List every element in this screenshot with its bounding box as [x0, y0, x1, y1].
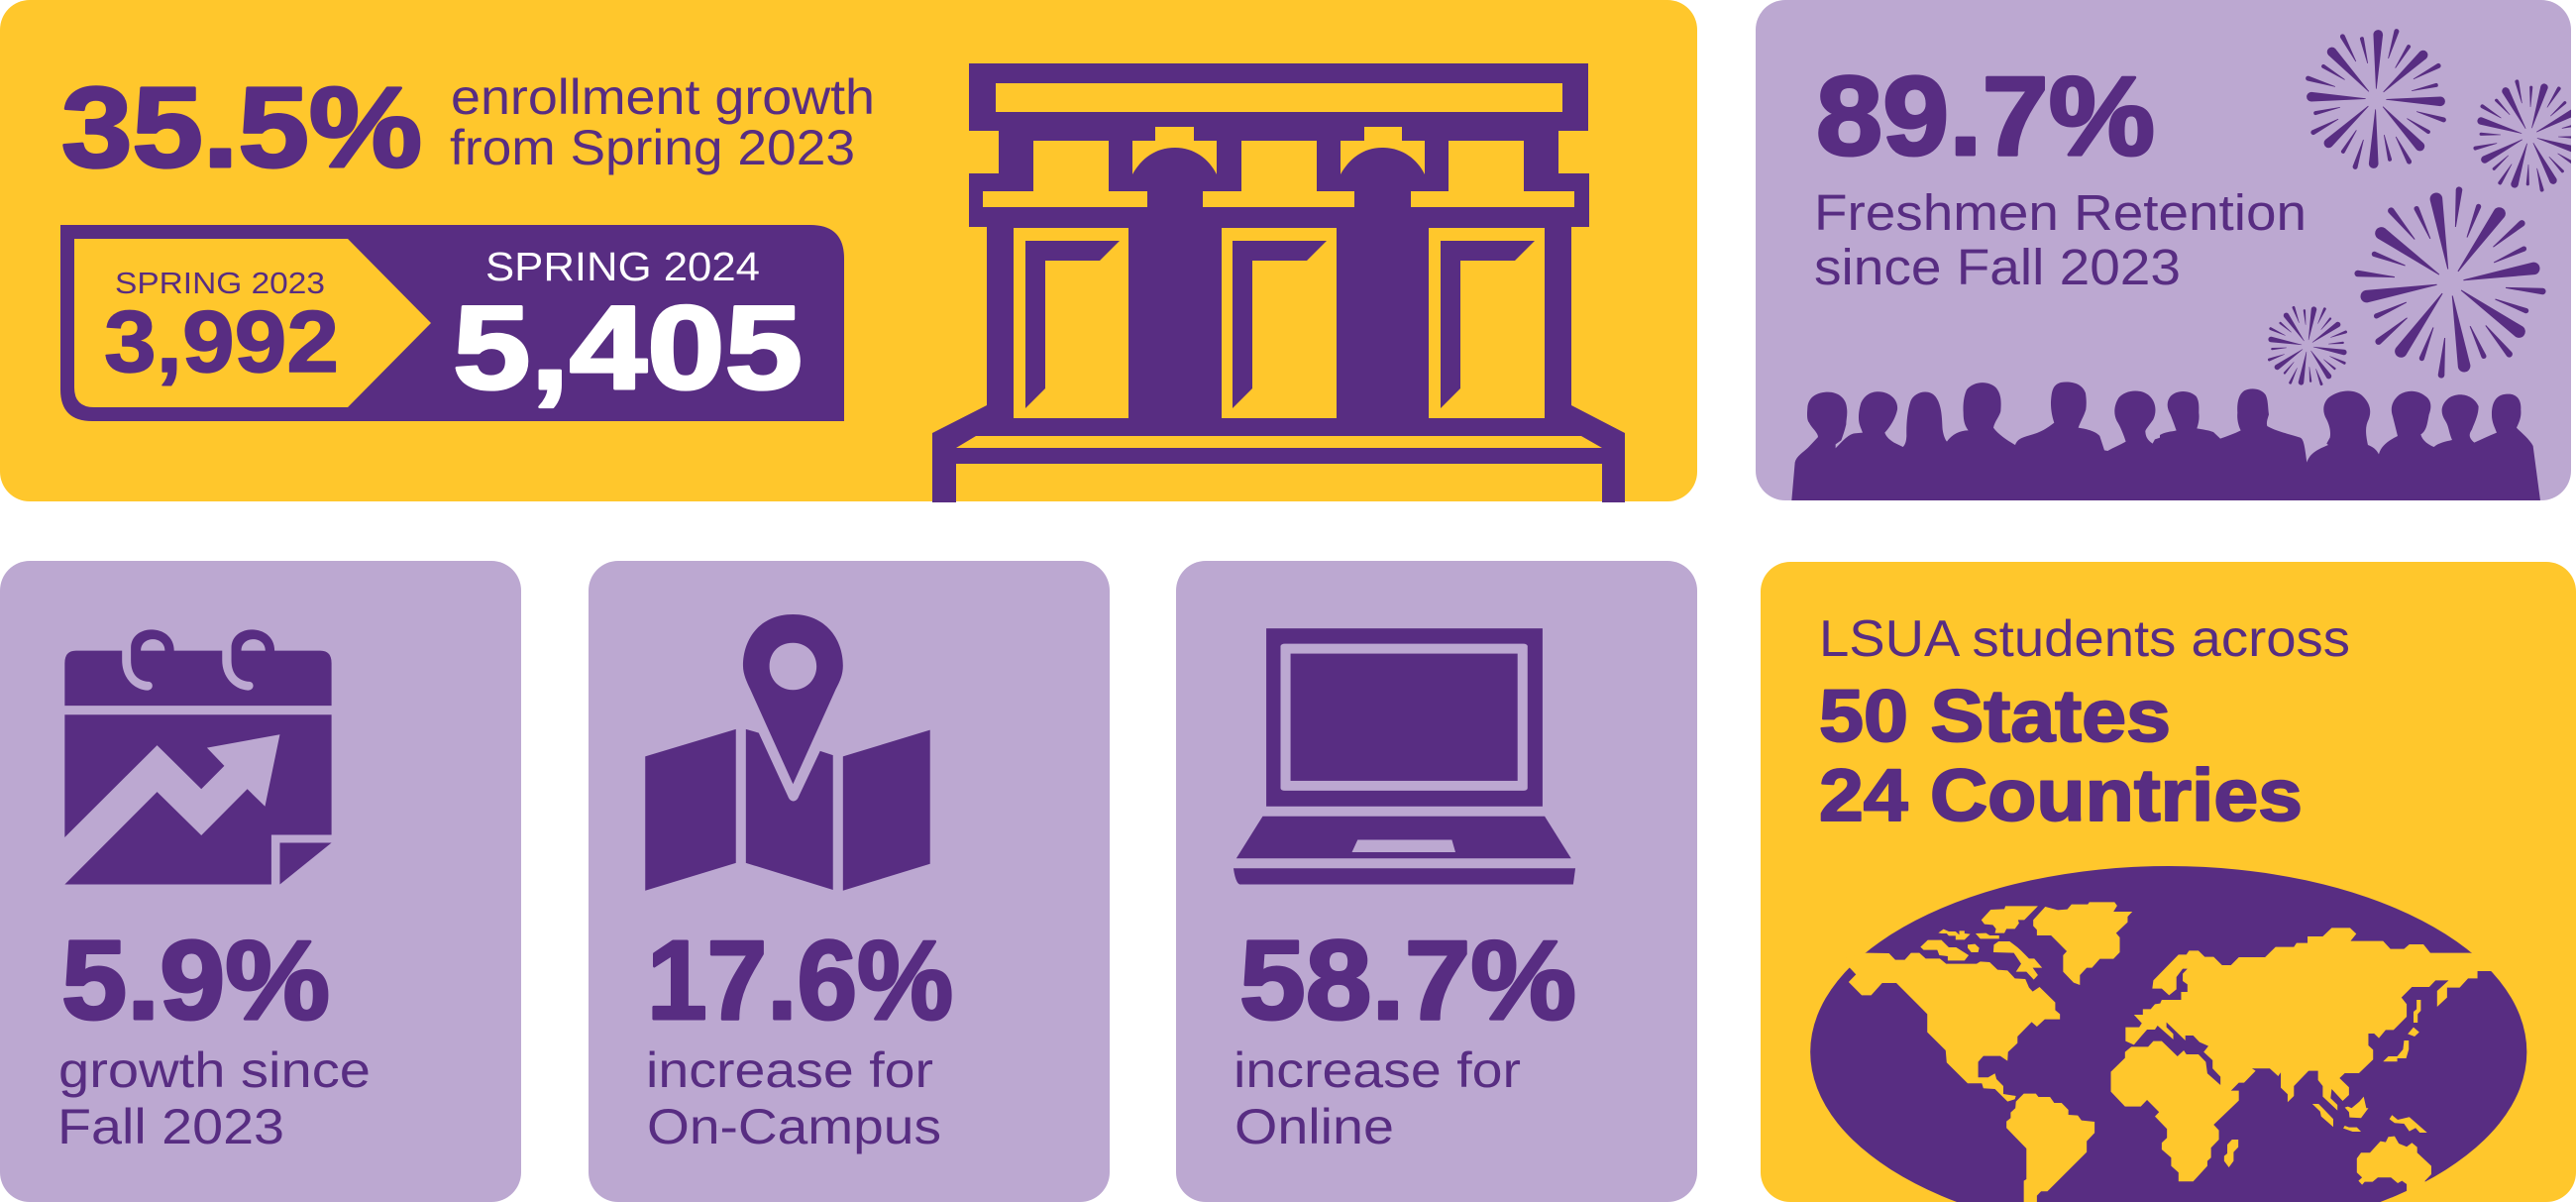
retention caption: Freshmen Retention	[1814, 184, 2307, 241]
panel: freshmen retention	[1756, 0, 2576, 500]
icon: laptop	[1234, 628, 1575, 885]
caption: growth since	[58, 1042, 371, 1098]
headline stat 89.7%: 89.7%	[1816, 54, 2155, 178]
spring 2023 label: SPRING 2023	[115, 266, 325, 300]
retention caption: since Fall 2023	[1814, 239, 2181, 295]
stat 17.6%: 17.6%	[647, 918, 953, 1042]
panel: online increase	[1176, 561, 1697, 1202]
icon: map with location pin	[645, 614, 930, 891]
stat 5.9%: 5.9%	[61, 918, 330, 1042]
caption	[1234, 1042, 1521, 1154]
caption: Fall 2023	[57, 1099, 284, 1154]
caption: increase for	[646, 1042, 933, 1098]
banner: spring comparison	[60, 225, 844, 421]
icon: fireworks	[2260, 25, 2576, 393]
spring 2023 value: 3,992	[104, 292, 339, 390]
caption: Online	[1234, 1099, 1394, 1154]
panel: global reach	[1761, 562, 2576, 1202]
enrollment growth caption	[450, 69, 875, 175]
icon: world map	[1810, 866, 2526, 1202]
caption: On-Campus	[647, 1099, 941, 1154]
icon: crowd silhouette	[1791, 382, 2540, 500]
retention caption	[1814, 184, 2307, 295]
stat 58.7%: 58.7%	[1239, 918, 1576, 1042]
panel: enrollment growth	[0, 0, 1697, 502]
panel: growth since fall 2023	[0, 561, 521, 1202]
caption: increase for	[1234, 1042, 1521, 1098]
intro line: LSUA students across	[1819, 610, 2350, 668]
stat 24 countries: 24 Countries	[1819, 754, 2303, 836]
headline stat 35.5%: 35.5%	[61, 64, 422, 191]
enrollment growth caption: from Spring 2023	[450, 120, 855, 175]
stat 50 states: 50 States	[1819, 675, 2171, 757]
caption	[57, 1042, 371, 1154]
spring 2024 label: SPRING 2024	[485, 244, 760, 289]
icon: campus building	[932, 63, 1625, 502]
icon: calendar with rising arrow	[64, 629, 332, 885]
caption	[646, 1042, 941, 1154]
panel: on-campus increase	[589, 561, 1110, 1202]
enrollment growth caption: enrollment growth	[451, 69, 875, 125]
spring 2024 value: 5,405	[453, 281, 803, 414]
